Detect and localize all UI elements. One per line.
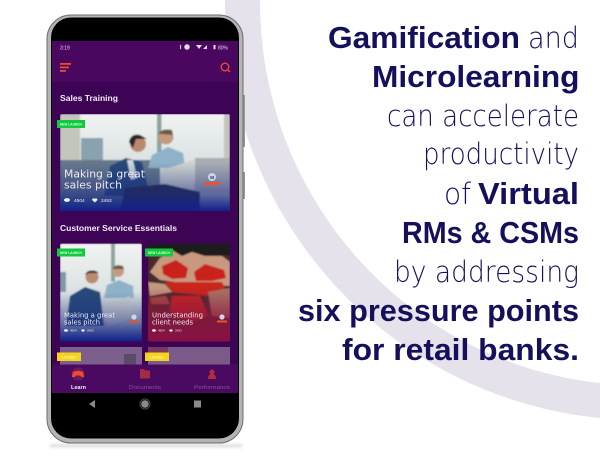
headline text block: Virtual xyxy=(478,176,579,211)
card title: Making a great xyxy=(64,168,145,180)
headline text block: can accelerate xyxy=(387,99,579,133)
phone bezel xyxy=(51,18,239,438)
icon: menu xyxy=(60,63,71,72)
card: Understanding client needs xyxy=(145,244,230,342)
android navigation buttons xyxy=(89,399,201,409)
headline text block: productivity xyxy=(423,137,579,171)
locked card left: LOCKED xyxy=(62,356,76,360)
badge: new launch: NEW LAUNCH xyxy=(148,251,170,255)
card title xyxy=(64,312,115,326)
card logo: M xyxy=(210,175,214,180)
heading: Customer Service Essentials: Customer Service Essentials xyxy=(60,224,178,233)
card title: Making a great xyxy=(64,312,115,320)
headline text block: Gamification xyxy=(328,20,520,55)
card stats: 4504 xyxy=(70,328,77,332)
badge: new launch xyxy=(57,120,85,128)
status bar: 3:19 xyxy=(60,46,70,52)
icon: search xyxy=(221,63,230,72)
card logo xyxy=(129,314,139,322)
locked card right: LOCKED xyxy=(150,356,164,360)
locked card left xyxy=(57,347,142,365)
card title: sales pitch xyxy=(64,180,122,192)
card title: sales pitch xyxy=(64,318,100,326)
badge: new launch: NEW LAUNCH xyxy=(60,251,82,255)
phone drop shadow xyxy=(50,444,242,447)
headline text block: Microlearning xyxy=(372,59,580,94)
card title: Understanding xyxy=(152,312,203,320)
nav item: Learn: Learn xyxy=(71,385,87,391)
phone body xyxy=(47,15,243,443)
headline text block: and xyxy=(528,21,579,55)
headline text block: six pressure points xyxy=(298,293,579,328)
nav item: Documents: Documents xyxy=(129,385,161,391)
card stats xyxy=(152,328,182,332)
nav item: Documents xyxy=(129,369,161,391)
card title: client needs xyxy=(152,318,193,326)
card title xyxy=(64,168,145,192)
headline text block: by addressing xyxy=(394,255,579,289)
headline text block: of xyxy=(444,177,472,211)
card stats xyxy=(64,328,94,332)
card logo xyxy=(217,314,227,322)
card logo xyxy=(204,173,220,185)
decorative arc xyxy=(225,0,600,418)
phone side buttons xyxy=(243,95,245,199)
status bar: 80% xyxy=(218,46,229,52)
nav item: Performance: Performance xyxy=(194,385,230,391)
card stats xyxy=(64,198,112,204)
card stats: 2453 xyxy=(87,328,94,332)
card stats: 2453 xyxy=(101,198,112,204)
card stats: 2453 xyxy=(175,328,182,332)
bottom navigation xyxy=(52,364,238,393)
app screen xyxy=(52,41,238,393)
badge: new launch: NEW LAUNCH xyxy=(60,122,82,126)
hero card: Making a great sales pitch xyxy=(57,114,230,211)
nav item: Learn xyxy=(71,368,87,391)
nav item: Performance xyxy=(194,369,230,391)
phone mockup xyxy=(47,15,245,447)
card title xyxy=(152,312,203,326)
headline text block: for retail banks. xyxy=(342,332,579,367)
status bar xyxy=(60,44,229,52)
card stats: 4504 xyxy=(74,198,85,204)
headline text block: RMs & CSMs xyxy=(402,215,579,250)
headline text block xyxy=(298,20,580,367)
app header bar xyxy=(52,41,238,82)
locked card right xyxy=(145,347,230,365)
card: Making a great sales pitch xyxy=(57,244,142,342)
card stats: 4504 xyxy=(158,328,165,332)
heading: Sales Training: Sales Training xyxy=(60,94,118,103)
